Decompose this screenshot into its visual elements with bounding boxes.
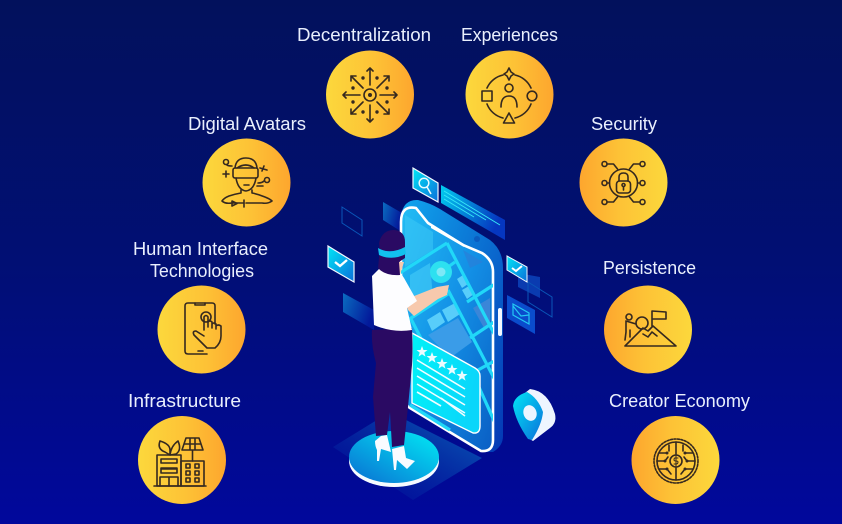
outline panel left <box>342 207 362 236</box>
label: Digital Avatars <box>188 114 306 134</box>
text panel top <box>441 185 505 240</box>
icon: green building <box>154 438 206 486</box>
review card <box>412 333 480 433</box>
item: Experiences <box>461 25 558 138</box>
circle <box>632 416 720 504</box>
search card <box>413 168 438 202</box>
lower left panel <box>343 293 374 330</box>
map pin <box>449 261 456 267</box>
location pin <box>513 389 555 441</box>
check card right <box>507 256 540 298</box>
item: Persistence <box>603 258 696 374</box>
platform <box>349 431 439 487</box>
floor shadow <box>333 412 482 500</box>
label: Human Interface <box>133 239 268 259</box>
neck <box>396 262 404 275</box>
label: Creator Economy <box>609 391 750 411</box>
legs <box>372 328 412 447</box>
icon: touch phone <box>185 303 221 354</box>
circle <box>202 138 290 226</box>
hair <box>378 230 405 275</box>
outline panel right <box>528 282 552 317</box>
label: Persistence <box>603 258 696 278</box>
circle <box>138 416 226 504</box>
circle <box>580 138 668 226</box>
label: Experiences <box>461 25 558 45</box>
woman <box>372 230 449 470</box>
item: Security <box>580 114 668 226</box>
icon: network lock <box>602 162 645 204</box>
item: Decentralization <box>297 25 431 138</box>
shirt <box>372 268 417 331</box>
item: Digital Avatars <box>188 114 306 226</box>
phone side button <box>498 308 502 336</box>
circle <box>326 50 414 138</box>
circle <box>158 286 246 374</box>
item: Infrastructure <box>128 391 241 504</box>
map roads and blocks <box>401 215 493 432</box>
arm <box>404 285 449 316</box>
headset band <box>378 247 406 258</box>
circle <box>466 50 554 138</box>
dark panel behind phone <box>383 202 402 232</box>
icon: person with shapes <box>482 68 537 123</box>
label: Infrastructure <box>128 391 241 411</box>
phone screen <box>395 208 500 451</box>
icon: climber and mountain <box>625 311 676 346</box>
icon: VR avatar <box>222 158 272 207</box>
illustration: person using a phone with map <box>328 168 555 500</box>
label line 2: Technologies <box>150 261 254 281</box>
heels <box>375 435 391 461</box>
speaker bar <box>431 224 464 247</box>
icon: radial arrows <box>343 68 397 122</box>
icon: circuit coin <box>654 439 698 483</box>
circle <box>604 286 692 374</box>
check card left <box>328 246 354 282</box>
item: Creator Economy <box>609 391 750 504</box>
label: Decentralization <box>297 25 431 45</box>
mail card <box>507 295 535 334</box>
label: Security <box>591 114 657 134</box>
phone body side <box>401 200 503 452</box>
item: Human Interface Technologies <box>133 239 268 374</box>
